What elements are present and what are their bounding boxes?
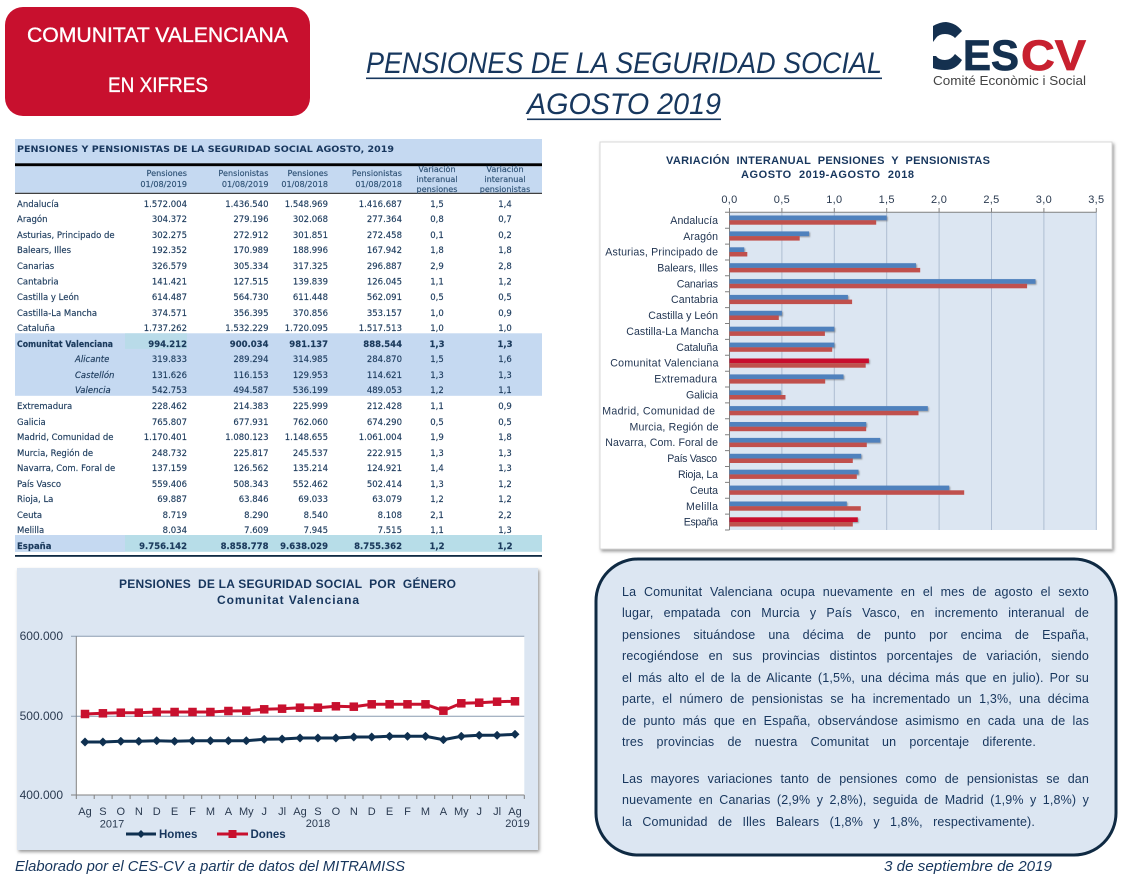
- table rows: 1.548.969: [285, 200, 328, 210]
- table rows: 489.053: [367, 386, 402, 396]
- table rows: 1,3: [497, 340, 513, 350]
- table rows: 326.579: [152, 262, 187, 272]
- table rows: 212.428: [367, 402, 402, 412]
- title: PENSIONES DE LA SEGURIDAD SOCIAL: [366, 47, 882, 80]
- region labels: Aragón: [683, 231, 718, 243]
- table rows: 124.921: [367, 464, 402, 474]
- table rows: 0,5: [430, 293, 444, 303]
- month and year labels: O: [332, 806, 341, 818]
- table rows: Balears, Illes: [17, 246, 72, 256]
- table rows: 63.846: [239, 495, 268, 505]
- table rows: 762.060: [293, 418, 328, 428]
- table rows: 1.170.401: [144, 433, 187, 443]
- paragraph 1: pensiones situándose una décima de punto por encima de España,: [622, 628, 1089, 642]
- table rows: 370.856: [293, 309, 328, 319]
- month and year labels: E: [386, 806, 393, 818]
- value axis labels: 400.000: [20, 788, 63, 802]
- table rows: 1,3: [430, 480, 444, 490]
- table rows: 564.730: [233, 293, 268, 303]
- bars: pensionistas: [730, 220, 1027, 526]
- region labels: Rioja, La: [678, 469, 718, 481]
- table rows: 1,4: [430, 464, 444, 474]
- month and year labels: Jl: [493, 806, 501, 818]
- legend: Dones: [250, 829, 286, 841]
- table rows: Aragón: [17, 214, 48, 225]
- table rows: Ceuta: [17, 511, 42, 521]
- table rows: 1.080.123: [225, 433, 268, 443]
- table rows: Rioja, La: [17, 495, 53, 505]
- table rows: 1,6: [498, 355, 512, 365]
- table rows: 1.572.004: [144, 200, 187, 210]
- plot area: [71, 636, 524, 799]
- table rows: 1,2: [498, 278, 512, 288]
- table header: Pensiones: [288, 168, 328, 178]
- region labels: Comunitat Valenciana: [610, 358, 719, 370]
- month and year labels: My: [239, 806, 254, 818]
- table rows: 116.153: [233, 371, 268, 381]
- table rows: 1.737.262: [144, 324, 187, 334]
- table rows: 0,9: [498, 309, 512, 319]
- table header: pensiones: [416, 184, 458, 194]
- card background: [600, 142, 1112, 549]
- table rows: 1,8: [430, 246, 444, 256]
- table rows: 272.458: [367, 231, 402, 241]
- table rows: 8.858.778: [221, 542, 269, 552]
- month and year labels: D: [153, 806, 161, 818]
- paragraph 1: lugar, empatada con Murcia y País Vasco, en incremento interanual de: [622, 606, 1089, 620]
- table rows: 1,8: [498, 246, 512, 256]
- table rows: 170.989: [233, 246, 268, 256]
- table rows: 304.372: [152, 215, 187, 225]
- table rows: Murcia, Región de: [17, 448, 93, 459]
- table rows: 1,3: [498, 526, 512, 536]
- paragraph 2: nuevamente en Canarias (2,9% y 2,8%), seguida de Madrid (1,9% y 1,8%) y: [622, 793, 1089, 807]
- table rows: 0,1: [430, 231, 444, 241]
- table rows: 1.532.229: [225, 324, 268, 334]
- month and year labels: M: [421, 806, 430, 818]
- table rows: 1,1: [498, 386, 512, 396]
- table rows: 137.159: [152, 464, 187, 474]
- table rows: 1,3: [498, 449, 512, 459]
- month and year labels: Ag: [78, 806, 92, 818]
- table rows: 141.421: [152, 278, 187, 288]
- table rows: 9.638.029: [280, 542, 328, 552]
- table rows: 296.887: [367, 262, 402, 272]
- logo: CES CV: CV: [1021, 32, 1086, 80]
- table rows: 1,8: [498, 433, 512, 443]
- table rows: 7.515: [378, 526, 402, 536]
- value axis labels: 0,0: [721, 194, 738, 206]
- value axis labels: [721, 194, 1104, 206]
- table rows: 1,0: [430, 324, 444, 334]
- table rows: 305.334: [233, 262, 268, 272]
- month and year labels: A: [225, 806, 233, 818]
- month and year labels: 2017: [100, 818, 124, 830]
- table rows: 0,5: [498, 418, 512, 428]
- table rows: 248.732: [152, 449, 187, 459]
- month and year labels: N: [135, 806, 143, 818]
- table rows: Castilla-La Mancha: [17, 309, 97, 319]
- table header: 01/08/2019: [140, 179, 187, 189]
- table rows: 0,8: [430, 215, 444, 225]
- table header: Pensionistas: [352, 168, 402, 178]
- month and year labels: Ag: [508, 806, 522, 818]
- table header: 01/08/2019: [222, 179, 268, 189]
- bars: pensiones: [730, 216, 1036, 522]
- month and year labels: J: [261, 806, 267, 818]
- paragraph 2: la Comunidad de Illes Balears (1,8% y 1,8%, respectivamente).: [622, 815, 1035, 829]
- table rows: 139.839: [293, 278, 328, 288]
- region labels: Andalucía: [670, 215, 718, 227]
- table header: Variación: [418, 164, 456, 174]
- table rows: 63.079: [372, 495, 402, 505]
- table rows: 981.137: [289, 340, 328, 350]
- value axis labels: 3,5: [1088, 194, 1104, 206]
- table rows: 222.915: [367, 449, 402, 459]
- table rows: 8.034: [163, 526, 187, 536]
- table rows: 502.414: [367, 480, 402, 490]
- table rows: 0,9: [498, 402, 512, 412]
- table rows: 1,3: [498, 464, 512, 474]
- table rows: 1,0: [430, 309, 444, 319]
- line chart title: [119, 576, 456, 607]
- line chart title: PENSIONES DE LA SEGURIDAD SOCIAL POR GÉNERO: [119, 576, 456, 591]
- month and year labels: E: [171, 806, 178, 818]
- value axis labels: 1,5: [879, 194, 895, 206]
- month and year labels: 2019: [505, 818, 530, 830]
- header badge: Comunitat Valenciana en xifres: [5, 7, 310, 116]
- table rows: 542.753: [152, 386, 187, 396]
- table rows: 1.416.687: [359, 200, 402, 210]
- paragraph 2: [622, 769, 1090, 834]
- table rows: 188.996: [293, 246, 328, 256]
- month and year labels: O: [117, 806, 126, 818]
- region labels: España: [684, 516, 718, 528]
- table rows: 552.462: [293, 480, 328, 490]
- panel: line chart pensiones por género: [17, 568, 538, 850]
- logo: CES CV: Comité Econòmic i Social: [933, 73, 1086, 88]
- table rows: 1,9: [430, 433, 444, 443]
- table rows: [17, 200, 513, 552]
- bar chart title: [666, 154, 990, 181]
- table rows: 2,2: [498, 511, 512, 521]
- table rows: 9.756.142: [139, 542, 187, 552]
- table header: Variación: [486, 164, 524, 174]
- table rows: Comunitat Valenciana: [17, 340, 113, 350]
- region labels: Murcia, Región de: [630, 422, 719, 434]
- table rows: 126.562: [233, 464, 268, 474]
- table rows: 1,3: [430, 371, 444, 381]
- table rows: 1,3: [498, 371, 512, 381]
- month and year labels: A: [440, 806, 448, 818]
- paragraph 1: parte, el número de pensionistas se ha incrementado un 1,3%, una décima: [622, 692, 1089, 706]
- table rows: 279.196: [233, 215, 268, 225]
- table rows: 228.462: [152, 402, 187, 412]
- month and year labels: [78, 806, 530, 830]
- table rows: 7.609: [244, 526, 268, 536]
- table rows: 1,3: [429, 340, 445, 350]
- paragraph 1: La Comunitat Valenciana ocupa nuevamente en el mes de agosto el sexto: [622, 585, 1089, 599]
- table rows: 900.034: [230, 340, 269, 350]
- table rows: 69.887: [157, 495, 187, 505]
- paragraph 1: recogiéndose en sus provincias distintos porcentajes de variación, siendo: [622, 649, 1089, 663]
- table rows: 277.364: [367, 215, 402, 225]
- table rows: 1.720.095: [285, 324, 328, 334]
- bar chart title: VARIACIÓN INTERANUAL PENSIONES Y PENSIONISTAS: [666, 154, 990, 167]
- table rows: 562.091: [367, 293, 402, 303]
- table header: [15, 163, 542, 194]
- table rows: 0,2: [498, 231, 512, 241]
- table rows: 114.621: [367, 371, 402, 381]
- table rows: 494.587: [233, 386, 268, 396]
- table rows: 1,5: [430, 355, 444, 365]
- table rows: 508.343: [233, 480, 268, 490]
- series: Dones: [85, 701, 515, 714]
- table rows: 8.108: [378, 511, 402, 521]
- table rows: 131.626: [152, 371, 187, 381]
- value axis labels: 3,0: [1036, 194, 1052, 206]
- month and year labels: J: [476, 806, 482, 818]
- region labels: Asturias, Principado de: [605, 246, 718, 258]
- table rows: 245.537: [293, 449, 328, 459]
- table rows: 1.517.513: [359, 324, 402, 334]
- table rows: 888.544: [363, 340, 402, 350]
- table rows: 1,2: [497, 542, 513, 552]
- region labels: Castilla y León: [648, 310, 718, 322]
- table rows: 1,0: [498, 324, 512, 334]
- table rows: 1,2: [429, 542, 445, 552]
- table rows: 994.212: [148, 340, 187, 350]
- table rows: 0,5: [498, 293, 512, 303]
- text panel: commentary: [596, 559, 1116, 855]
- table rows: 1,1: [430, 526, 444, 536]
- table rows: 135.214: [293, 464, 328, 474]
- card background: [17, 568, 538, 850]
- table header: Pensiones: [147, 168, 187, 178]
- table rows: 1,4: [498, 200, 512, 210]
- value axis labels: 500.000: [20, 709, 63, 723]
- table rows: 8.755.362: [354, 542, 402, 552]
- value axis labels: 2,5: [983, 194, 1000, 206]
- table rows: 225.817: [233, 449, 268, 459]
- table rows: 1,2: [430, 495, 444, 505]
- value axis labels: [20, 629, 63, 802]
- table rows: 302.068: [293, 215, 328, 225]
- panel: bar chart variación interanual: [600, 142, 1112, 549]
- legend: Homes: [159, 829, 197, 841]
- region labels: Navarra, Com. Foral de: [605, 437, 718, 449]
- month and year labels: S: [314, 806, 322, 818]
- table rows: 1,2: [430, 386, 444, 396]
- title: AGOSTO 2019: [525, 88, 721, 121]
- logo: CES CV: [933, 22, 1086, 88]
- table rows: Melilla: [17, 526, 44, 536]
- table rows: 1.436.540: [225, 200, 268, 210]
- table rows: 1,2: [498, 480, 512, 490]
- table rows: Castilla y León: [17, 292, 79, 303]
- table rows: 127.515: [233, 278, 268, 288]
- value axis labels: 600.000: [20, 629, 63, 643]
- region labels: [602, 215, 719, 528]
- region labels: Cataluña: [676, 342, 718, 354]
- legend: [126, 829, 286, 841]
- table header: interanual: [416, 174, 458, 184]
- table rows: 272.912: [233, 231, 268, 241]
- value axis labels: 1,0: [826, 194, 842, 206]
- header badge: Comunitat Valenciana en xifres: EN XIFRES: [108, 74, 208, 97]
- table rows: 2,1: [430, 511, 444, 521]
- table rows: 8.290: [244, 511, 268, 521]
- table rows: 225.999: [293, 402, 328, 412]
- region labels: Galicia: [686, 390, 718, 402]
- table rows: País Vasco: [17, 480, 61, 490]
- table header: 01/08/2018: [281, 179, 328, 189]
- table rows: Cataluña: [17, 324, 55, 334]
- table rows: Navarra, Com. Foral de: [17, 464, 115, 474]
- region labels: Madrid, Comunidad de: [602, 406, 715, 418]
- table rows: 167.942: [367, 246, 402, 256]
- region labels: Castilla-La Mancha: [626, 326, 719, 338]
- bar chart title: AGOSTO 2019-AGOSTO 2018: [741, 169, 914, 181]
- month and year labels: 2018: [306, 818, 330, 830]
- table rows: 1.061.004: [359, 433, 402, 443]
- table rows: 614.487: [152, 293, 187, 303]
- table rows: 214.383: [233, 402, 268, 412]
- table title: [15, 139, 542, 164]
- table rows: 353.157: [367, 309, 402, 319]
- value axis labels: 2,0: [931, 194, 947, 206]
- table rows: 1,1: [430, 278, 444, 288]
- table rows: 301.851: [293, 231, 328, 241]
- table rows: 1,2: [498, 495, 512, 505]
- table rows: 2,9: [430, 262, 444, 272]
- series: Homes: [85, 734, 515, 742]
- highlighted bands: [15, 333, 542, 557]
- table rows: 765.807: [152, 418, 187, 428]
- table rows: Canarias: [17, 262, 55, 272]
- table rows: 317.325: [293, 262, 328, 272]
- table rows: 677.931: [233, 418, 268, 428]
- table header: 01/08/2018: [355, 179, 402, 189]
- region labels: Melilla: [686, 501, 718, 513]
- table rows: 1,3: [430, 449, 444, 459]
- table rows: Madrid, Comunidad de: [17, 433, 113, 443]
- line chart title: Comunitat Valenciana: [217, 593, 359, 607]
- logo: CES CV: ES: [963, 32, 1019, 80]
- month and year labels: Ag: [293, 806, 307, 818]
- table rows: 302.275: [152, 231, 187, 241]
- table rows: 0,5: [430, 418, 444, 428]
- region labels: Cantabria: [671, 294, 718, 306]
- title: [366, 47, 882, 121]
- month and year labels: M: [206, 806, 215, 818]
- paragraph 2: Las mayores variaciones tanto de pensiones como de pensionistas se dan: [622, 772, 1089, 786]
- region labels: Canarias: [677, 278, 718, 290]
- month and year labels: My: [454, 806, 469, 818]
- table rows: Cantabria: [17, 278, 59, 288]
- plot area and grid: [725, 208, 1096, 530]
- table rows: 69.033: [298, 495, 328, 505]
- table rows: 674.290: [367, 418, 402, 428]
- table rows: 559.406: [152, 480, 187, 490]
- table rows: 126.045: [367, 278, 402, 288]
- table rows: 192.352: [152, 246, 187, 256]
- header badge: Comunitat Valenciana en xifres: COMUNITAT VALENCIANA: [27, 24, 288, 47]
- region labels: Balears, Illes: [657, 262, 718, 274]
- table rows: 289.294: [233, 355, 268, 365]
- region labels: País Vasco: [667, 453, 717, 465]
- region labels: Extremadura: [654, 374, 717, 386]
- region labels: Ceuta: [690, 485, 718, 497]
- table header: Pensionistas: [218, 168, 268, 178]
- table rows: 319.833: [152, 355, 187, 365]
- panel: pensions table: [15, 139, 542, 557]
- table rows: 2,8: [498, 262, 512, 272]
- table rows: 314.985: [293, 355, 328, 365]
- paragraph 1: el más alto el de la de Alicante (1,5%, una décima más que en julio). Por su: [622, 671, 1089, 685]
- month and year labels: Jl: [278, 806, 286, 818]
- table rows: Asturias, Principado de: [17, 231, 115, 241]
- footer date: 3 de septiembre de 2019: [884, 859, 1052, 875]
- table rows: 1,1: [430, 402, 444, 412]
- table rows: Galicia: [17, 418, 46, 428]
- table title: PENSIONES Y PENSIONISTAS DE LA SEGURIDAD SOCIAL AGOSTO, 2019: [17, 145, 394, 155]
- table header: interanual: [484, 174, 526, 184]
- month and year labels: N: [350, 806, 358, 818]
- table rows: Valencia: [75, 386, 111, 396]
- table rows: 7.945: [304, 526, 328, 536]
- footer source: Elaborado por el CES-CV a partir de datos del MITRAMISS: [15, 859, 405, 875]
- table rows: 536.199: [293, 386, 328, 396]
- table rows: 129.953: [293, 371, 328, 381]
- table rows: 1,5: [430, 200, 444, 210]
- paragraph 1: [622, 582, 1090, 754]
- table rows: 0,7: [498, 215, 512, 225]
- paragraph 1: tres provincias de nuestra Comunitat un porcentaje diferente.: [622, 735, 1036, 749]
- table rows: España: [17, 542, 52, 552]
- table rows: Andalucía: [17, 200, 59, 210]
- table rows: 374.571: [152, 309, 187, 319]
- value axis labels: 0,5: [774, 194, 790, 206]
- table rows: Castellón: [75, 370, 114, 381]
- table rows: 356.395: [233, 309, 268, 319]
- table rows: 284.870: [367, 355, 402, 365]
- table rows: 8.719: [163, 511, 187, 521]
- table rows: 8.540: [304, 511, 328, 521]
- month and year labels: F: [404, 806, 411, 818]
- table header: pensionistas: [480, 184, 530, 194]
- paragraph 1: de punto más que en España, observándose asimismo en cada una de las: [622, 714, 1089, 728]
- table rows: 1.148.655: [285, 433, 328, 443]
- table rows: 611.448: [293, 293, 328, 303]
- table rows: Alicante: [74, 355, 109, 365]
- month and year labels: S: [99, 806, 107, 818]
- month and year labels: F: [189, 806, 196, 818]
- month and year labels: D: [368, 806, 376, 818]
- table rows: Extremadura: [17, 402, 72, 412]
